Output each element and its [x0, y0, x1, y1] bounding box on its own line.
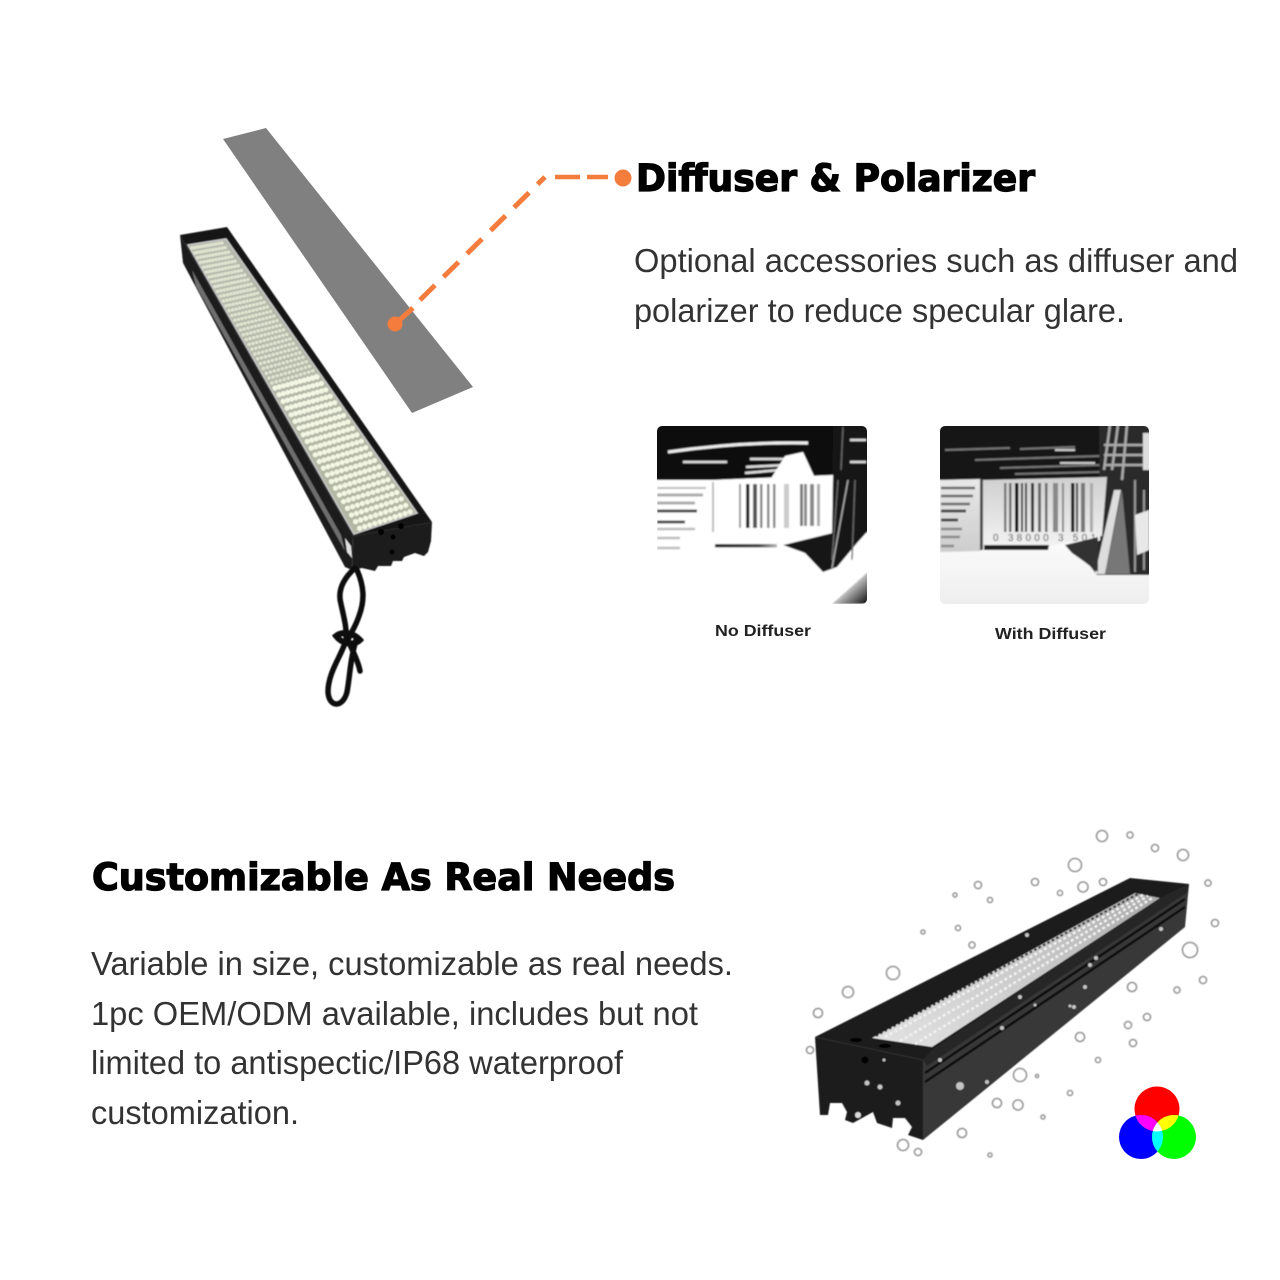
icon: RGB colour circles	[1119, 1086, 1196, 1159]
water droplets	[806, 830, 1218, 1157]
caption: with diffuser: With Diffuser	[995, 626, 1106, 643]
caption: no diffuser: No Diffuser	[715, 623, 811, 640]
cable	[328, 568, 363, 704]
diffuser sheet	[223, 128, 473, 413]
side face	[923, 884, 1189, 1140]
description: customization	[91, 945, 733, 1131]
product: black bar light with water	[815, 878, 1189, 1140]
description: diffuser: Optional accessories such as diffuser and	[634, 242, 1238, 279]
description: customization: limited to antispectic/IP68 waterproof	[91, 1044, 624, 1081]
LED array	[872, 893, 1160, 1047]
description: customization: Variable in size, customizable as real needs.	[91, 945, 733, 982]
top rim	[815, 878, 1189, 1060]
LED dots	[192, 243, 411, 529]
heading: customizable: Customizable As Real Needs	[92, 856, 675, 899]
photo: no diffuser	[657, 426, 867, 604]
photo: with diffuser	[940, 426, 1149, 604]
heading: diffuser and polarizer: Diffuser & Polarizer	[636, 157, 1036, 200]
photo: with diffuser: 0 38000 3 501	[993, 533, 1096, 544]
top frame of bar light	[180, 227, 432, 536]
description: diffuser	[634, 242, 1238, 329]
front face	[815, 1037, 923, 1140]
callout: dashed leader line	[388, 170, 632, 332]
description: customization: 1pc OEM/ODM available, includes but not	[91, 995, 698, 1032]
front end cap	[352, 522, 432, 571]
description: diffuser: polarizer to reduce specular glare.	[634, 292, 1125, 329]
drops on bar	[855, 927, 1163, 1118]
LED panel	[188, 239, 417, 534]
product: bar light with white LEDs and cable	[180, 227, 432, 704]
side of bar light	[180, 235, 353, 570]
description: customization: customization.	[91, 1094, 299, 1131]
